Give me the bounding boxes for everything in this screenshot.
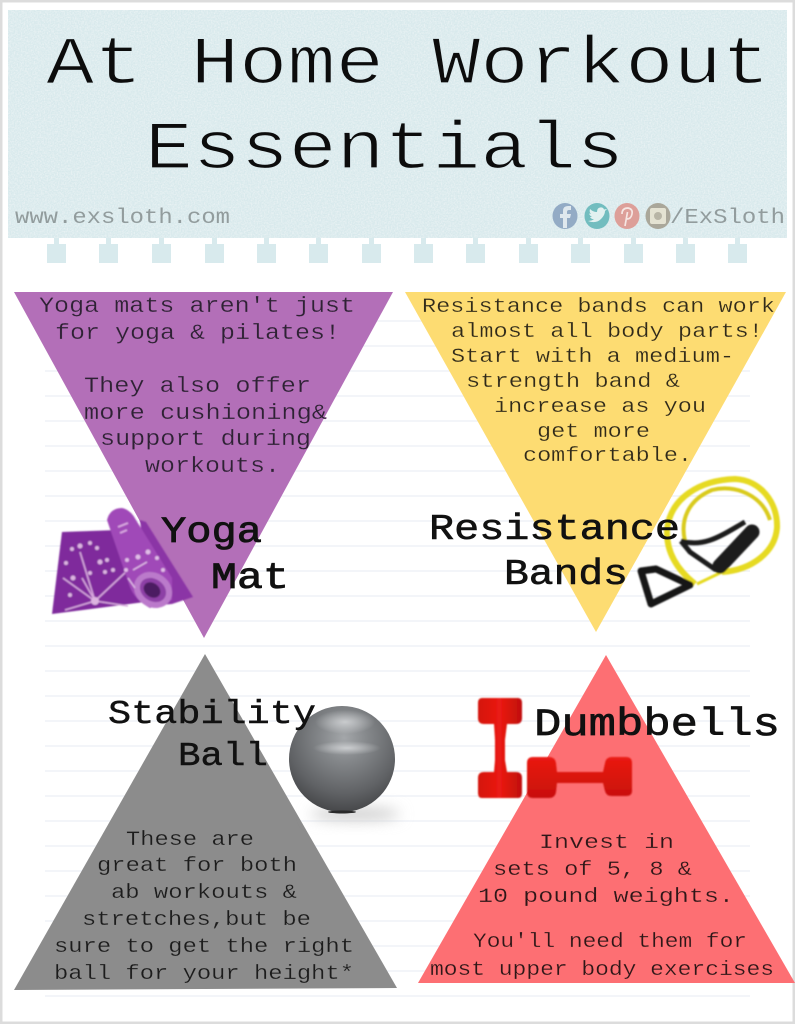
yoga mat description: They also offer (84, 374, 311, 399)
grey triangle (14, 654, 397, 990)
heading: stability ball: Stability (108, 696, 316, 734)
heading: resistance bands: Bands (504, 554, 628, 595)
yoga mat description: Yoga mats aren't just (39, 294, 355, 319)
yoga mat description: workouts. (145, 454, 280, 479)
heading: stability ball (108, 696, 316, 776)
heading: yoga mat: Yoga (161, 512, 262, 554)
resistance bands description: Start with a medium- (451, 346, 734, 369)
panel: yoga mat (14, 292, 393, 638)
dumbbells description: sets of 5, 8 & (493, 859, 692, 882)
resistance bands description: increase as you (494, 396, 706, 419)
stability ball description (54, 829, 354, 986)
social icons (552, 203, 670, 229)
notebook binding tabs (47, 238, 747, 263)
title: At Home Workout (46, 27, 770, 104)
social handle: /ExSloth (670, 207, 785, 230)
dumbbells description (430, 832, 774, 982)
dumbbells description: most upper body exercises (430, 959, 774, 982)
panel: dumbbells (418, 655, 795, 983)
resistance bands description: Resistance bands can work (422, 296, 775, 319)
resistance bands description: get more (537, 421, 650, 444)
stability ball description: stretches,but be (82, 909, 311, 932)
red triangle (418, 655, 795, 983)
yoga mat description: for yoga & pilates! (55, 321, 340, 346)
dumbbells description: 10 pound weights. (478, 886, 734, 909)
yoga mat description: support during (100, 427, 311, 452)
website url: www.exsloth.com (15, 207, 230, 230)
yoga mat description: more cushioning& (84, 401, 327, 426)
title (46, 27, 770, 189)
stability ball description: ball for your height* (54, 963, 354, 986)
stability ball description: sure to get the right (54, 936, 354, 959)
header banner (8, 10, 787, 238)
heading: resistance bands: Resistance (429, 509, 680, 550)
stability ball description: These are (126, 829, 254, 852)
stability ball description: ab workouts & (111, 882, 297, 905)
title: Essentials (145, 112, 624, 189)
resistance bands description: almost all body parts! (451, 321, 763, 344)
icon: stability ball (289, 706, 400, 821)
resistance bands description (422, 296, 775, 468)
purple triangle (14, 292, 393, 638)
icon: yoga mat (52, 508, 193, 615)
heading: yoga mat: Mat (211, 558, 289, 600)
heading: dumbbells: Dumbbells (534, 703, 780, 747)
yoga mat description (39, 294, 355, 479)
stability ball description: great for both (97, 855, 297, 878)
heading: stability ball: Ball (178, 738, 268, 776)
yellow triangle (405, 292, 786, 632)
resistance bands description: comfortable. (523, 445, 692, 468)
panel: stability ball (14, 654, 400, 990)
dumbbells description: Invest in (539, 832, 674, 855)
panel: resistance bands (405, 292, 786, 632)
resistance bands description: strength band & (466, 371, 680, 394)
icon: resistance bands (641, 479, 777, 604)
dumbbells description: You'll need them for (473, 931, 747, 954)
heading: yoga mat (161, 512, 289, 600)
heading: resistance bands (429, 509, 680, 595)
icon: dumbbells (478, 698, 632, 798)
